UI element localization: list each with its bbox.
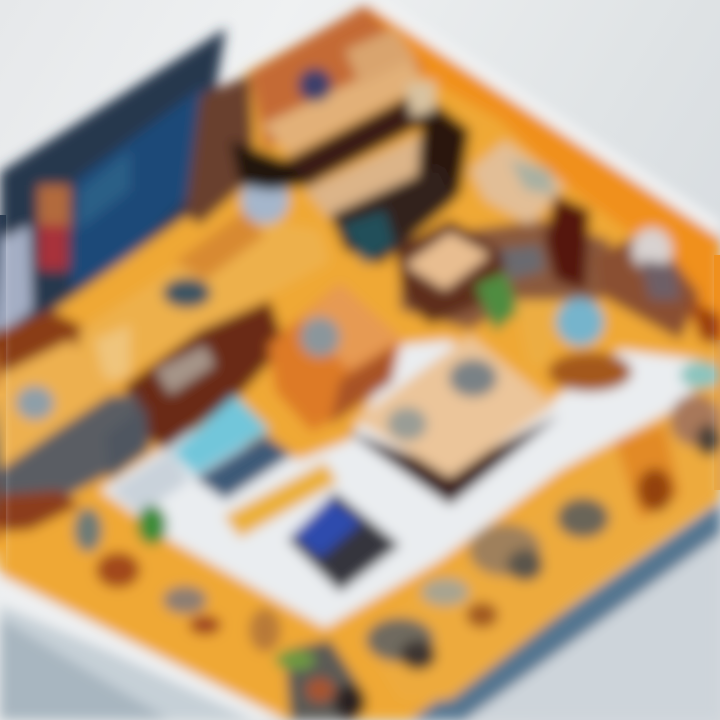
panel: top shelving unit bbox=[230, 28, 470, 265]
icon: rainbow bars on screen bbox=[0, 185, 70, 335]
panel: dark blue device bbox=[288, 492, 400, 592]
panel: brown backing of right shelves bbox=[400, 220, 610, 330]
panel: central table bbox=[345, 335, 560, 505]
floor lower right bbox=[430, 520, 720, 720]
panel: lower right items bbox=[360, 361, 720, 700]
panel: orange top shelf wall bbox=[250, 5, 425, 150]
panel: grey floor patch bbox=[110, 450, 190, 515]
panel: right desk items bbox=[395, 140, 720, 392]
panel: central orange cube bbox=[268, 283, 402, 432]
panel: blue monitor bbox=[172, 395, 292, 500]
panel: left desk and yellow shelf bbox=[0, 210, 330, 532]
floor shadow lower left bbox=[0, 605, 270, 720]
panel: dark blue screen bbox=[0, 28, 255, 345]
edge underlay bbox=[0, 215, 720, 575]
white board edge bbox=[365, 0, 720, 236]
panel: orange back wall bbox=[368, 8, 720, 345]
panel: lower left items bbox=[74, 505, 366, 720]
panel: white floor bbox=[100, 340, 700, 628]
panel: yellow bar bbox=[224, 462, 338, 538]
white lower left rim bbox=[0, 575, 285, 720]
icon: silver circle bbox=[241, 176, 289, 224]
blue side rim bbox=[410, 503, 720, 720]
